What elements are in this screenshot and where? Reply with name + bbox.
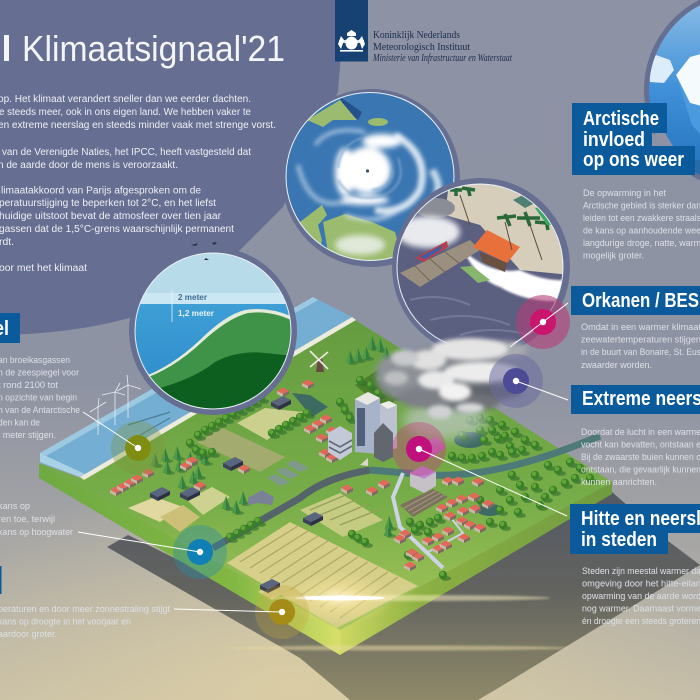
sea level markers	[172, 290, 215, 322]
logo text: Meteorologisch Instituut	[373, 42, 470, 53]
text: river flooding	[0, 501, 74, 538]
text: extreme rain: kunnen aanrichten.	[581, 477, 657, 488]
label: heat and rain in cities	[570, 504, 700, 554]
land surface	[39, 318, 612, 630]
text: sea level: n van de Antarctische	[0, 405, 80, 416]
birds	[191, 242, 217, 260]
hotspot: cities	[392, 422, 567, 516]
slab right side	[340, 482, 612, 655]
boats	[415, 241, 490, 283]
map: isometric landscape	[39, 297, 612, 655]
hurricane swirl	[298, 130, 438, 220]
ponds and ditch	[292, 393, 503, 516]
ploughed field	[400, 489, 448, 517]
storm cloud	[376, 338, 527, 440]
waves	[410, 297, 530, 335]
label: Arctic influence	[572, 103, 695, 175]
photo circle: hurricane	[282, 89, 460, 267]
text: sea level	[0, 355, 80, 441]
label: hurricanes	[571, 286, 700, 315]
slab left side	[39, 463, 340, 655]
jetty	[400, 240, 480, 287]
text: Arctic influence: De opwarming in het	[583, 188, 666, 199]
wind turbines	[90, 375, 141, 435]
city buildings	[328, 392, 446, 493]
label: Arctic influence: invloed	[583, 129, 645, 151]
text: extreme rain	[581, 427, 700, 488]
village roads	[393, 473, 463, 568]
title: Klimaatsignaal'21	[22, 28, 285, 69]
label: extreme rain	[571, 385, 700, 414]
text: sea level: an broeikasgassen	[0, 355, 70, 366]
text: drought	[0, 604, 170, 640]
crop field upper	[300, 493, 383, 537]
hotspot: drought	[174, 585, 309, 639]
logo text: Ministerie van Infrastructuur en Waterstaat	[372, 53, 512, 64]
hotspot: sea level	[83, 412, 165, 475]
logo text	[372, 30, 512, 64]
road and river	[213, 436, 600, 548]
label: sea level	[0, 313, 20, 343]
panel background wedge for label	[655, 133, 673, 146]
text: sea level: n opzichte van begin	[0, 392, 77, 404]
wave foam	[466, 255, 562, 302]
text: hurricanes	[581, 322, 700, 371]
crest	[338, 30, 365, 52]
sea level markers: 1,2 meter	[178, 308, 215, 318]
intro text: e steeds meer, ook in ons eigen land. We hebben vaker te	[0, 107, 251, 118]
fields	[128, 408, 309, 532]
intro text: van de Verenigde Naties, het IPCC, heeft vastgesteld dat	[2, 147, 251, 158]
intro text: limaatakkoord van Parijs afgesproken om de	[1, 186, 201, 196]
logo text: Koninklijk Nederlands	[373, 30, 460, 41]
windmill	[310, 351, 328, 372]
photo circle: tropical island storm	[392, 175, 570, 356]
label: Arctic influence: Arctische	[583, 108, 659, 130]
text: Arctic influence: mogelijk groter.	[583, 250, 644, 262]
sea	[40, 297, 356, 480]
intro text: oor met het klimaat	[0, 263, 87, 274]
text: heat and rain in cities	[582, 566, 700, 627]
intro text: huidige uitstoot bevat de atmosfeer over tien jaar	[0, 211, 222, 222]
hotspot: river flooding	[78, 525, 227, 579]
photo circle: sea level rise	[129, 242, 300, 420]
photo circle: arctic	[644, 0, 700, 191]
intro text: gassen dat de 1,5°C-grens waarschijnlijk permanent	[0, 224, 234, 235]
spiral bands	[338, 138, 401, 198]
text: Arctic influence	[583, 188, 700, 262]
hotspot: extreme rain	[489, 354, 568, 408]
intro text: op. Het klimaat verandert sneller dan we eerder dachten.	[0, 94, 251, 105]
ground shadow	[107, 492, 700, 700]
text: river flooding: kans op hoogwater	[0, 527, 74, 538]
hut	[473, 230, 520, 272]
text: drought: kans op droogte in het voorjaar en	[0, 616, 131, 628]
label: Arctic influence: op ons weer	[583, 149, 684, 171]
land masses	[300, 98, 397, 260]
intro text	[0, 94, 276, 274]
logo block	[335, 0, 368, 62]
intro text: peratuurstijging te beperken tot 2°C, en het liefst	[0, 198, 216, 209]
hotspot: hurricanes	[510, 295, 570, 349]
text: sea level: n de zeespiegel voor	[0, 368, 80, 378]
dike	[149, 309, 290, 408]
intro text: en extreme neerslag en steeds minder vaak met strenge vorst.	[0, 120, 276, 131]
dark intro panel	[0, 0, 345, 335]
label: heat and rain in cities: in steden	[581, 529, 657, 551]
text: drought: peraturen en door meer zonnestraling stijgt	[0, 604, 170, 615]
palm trees	[450, 188, 558, 230]
text: hurricanes: zwaarder worden.	[581, 360, 652, 371]
houses and farms	[110, 380, 494, 593]
crop field large	[227, 522, 418, 628]
dark forest patch	[355, 365, 412, 410]
sea level markers: 2 meter	[178, 292, 208, 302]
trees	[150, 336, 598, 581]
sun flare	[230, 572, 570, 650]
intro text: n de aarde door de mens is veroorzaakt.	[0, 160, 178, 171]
label: drought	[0, 566, 2, 594]
